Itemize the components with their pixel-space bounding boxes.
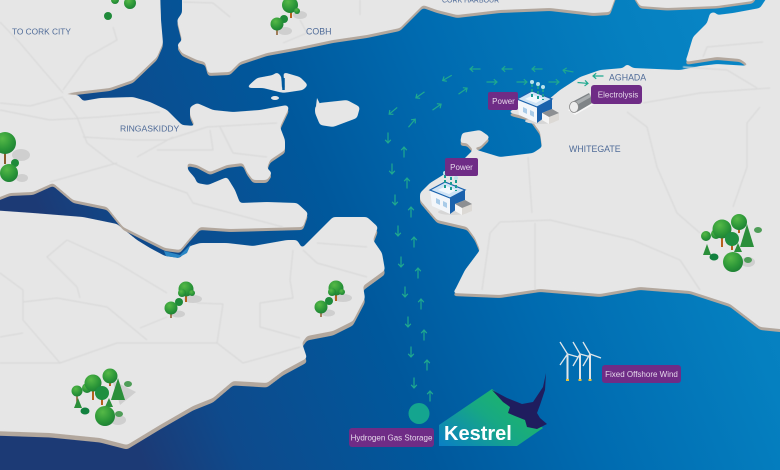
logo: Kestrel: Kestrel [444, 423, 512, 445]
trees: central [164, 282, 202, 318]
icon: power station Aghada [517, 80, 559, 124]
label: electrolysis: Electrolysis [598, 90, 638, 100]
islands [247, 72, 360, 127]
label: power Aghada [488, 92, 518, 110]
water glint under peninsula [164, 244, 191, 258]
trees: top left [104, 0, 136, 20]
place labels: RINGASKIDDY [120, 124, 179, 134]
land: southern peninsula [0, 210, 385, 450]
place labels: AGHADA [609, 72, 646, 82]
land: Cobh [177, 0, 618, 76]
label: power Whitegate [445, 158, 478, 176]
land: Whitegate and Aghada [420, 0, 780, 333]
label: hydrogen gas storage: Hydrogen Gas Storage [351, 434, 433, 442]
label: electrolysis [591, 85, 642, 104]
icon: electrolysis unit [568, 93, 596, 115]
trees: Cobh [270, 0, 307, 35]
hydrogen flow arrows [385, 66, 604, 401]
label: power Aghada: Power [492, 97, 515, 106]
land: far shore [630, 0, 760, 10]
place labels: TO CORK CITY [12, 26, 71, 36]
icon: offshore wind turbines [560, 342, 601, 380]
label: fixed offshore wind [602, 365, 681, 383]
trees: south east headland [314, 280, 352, 317]
label: power Whitegate: Power [450, 163, 473, 172]
hydrogen storage marker [408, 403, 430, 424]
trees: Ringaskiddy west [0, 132, 30, 182]
trees: south west cluster [72, 368, 136, 426]
label: hydrogen gas storage [349, 428, 434, 447]
icon: power station Whitegate [430, 171, 472, 215]
trees: east cluster [701, 214, 762, 272]
place labels [12, 0, 646, 154]
place labels: COBH [306, 26, 331, 36]
land: Ringaskiddy and Cork side [0, 0, 308, 253]
logo: Kestrel [439, 373, 547, 446]
place labels: WHITEGATE [569, 144, 621, 154]
label: fixed offshore wind: Fixed Offshore Wind [605, 370, 678, 379]
